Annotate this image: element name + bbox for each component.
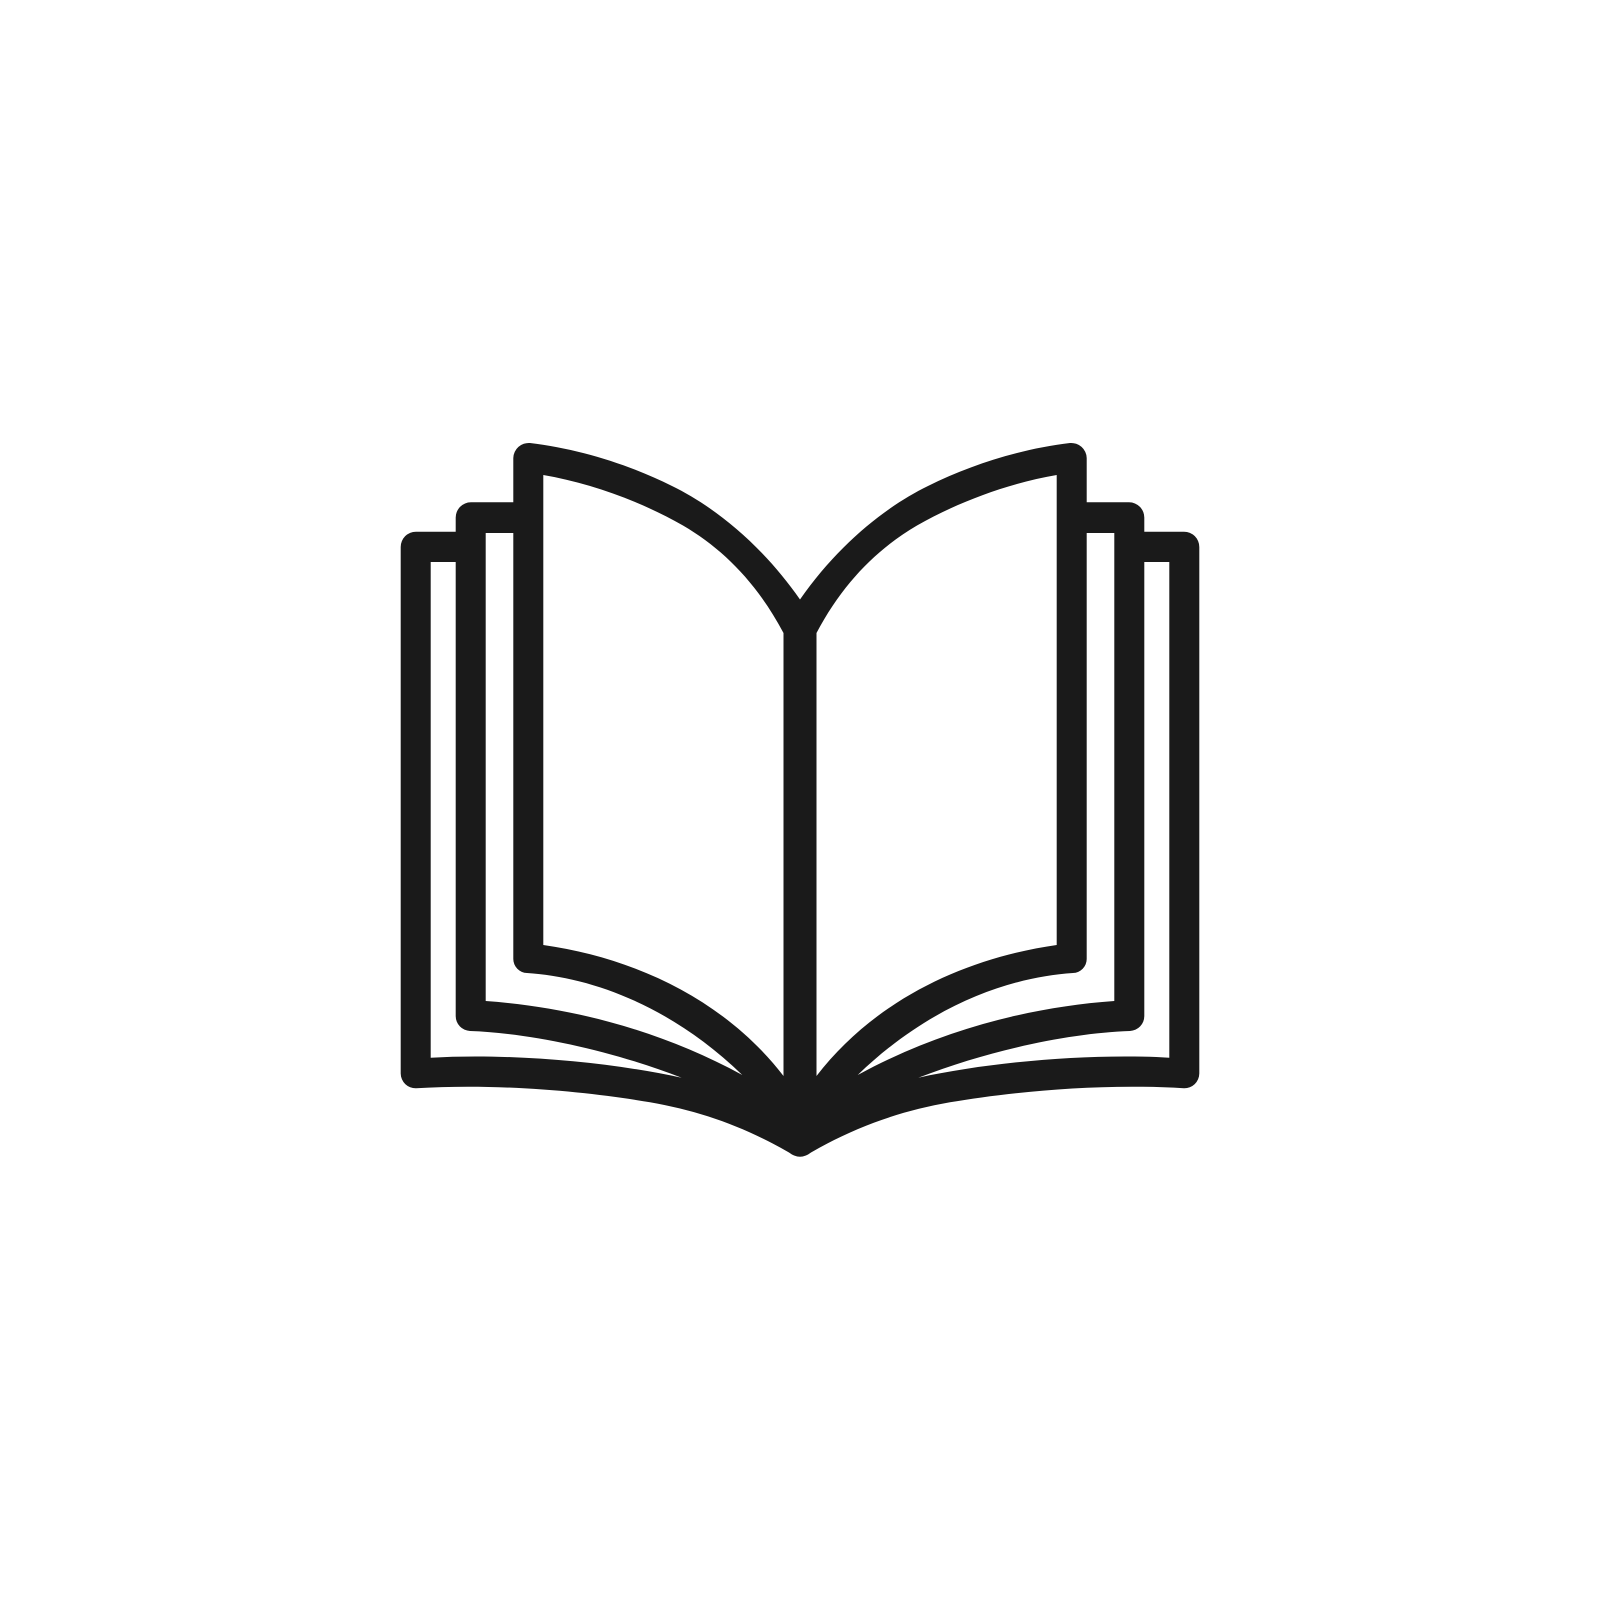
- right outer page: [918, 562, 1169, 1078]
- left front page: [543, 475, 784, 1076]
- left outer page: [431, 562, 682, 1078]
- right front page: [816, 475, 1057, 1076]
- left middle page: [486, 533, 742, 1075]
- book silhouette: [401, 443, 1199, 1157]
- right middle page: [858, 533, 1114, 1075]
